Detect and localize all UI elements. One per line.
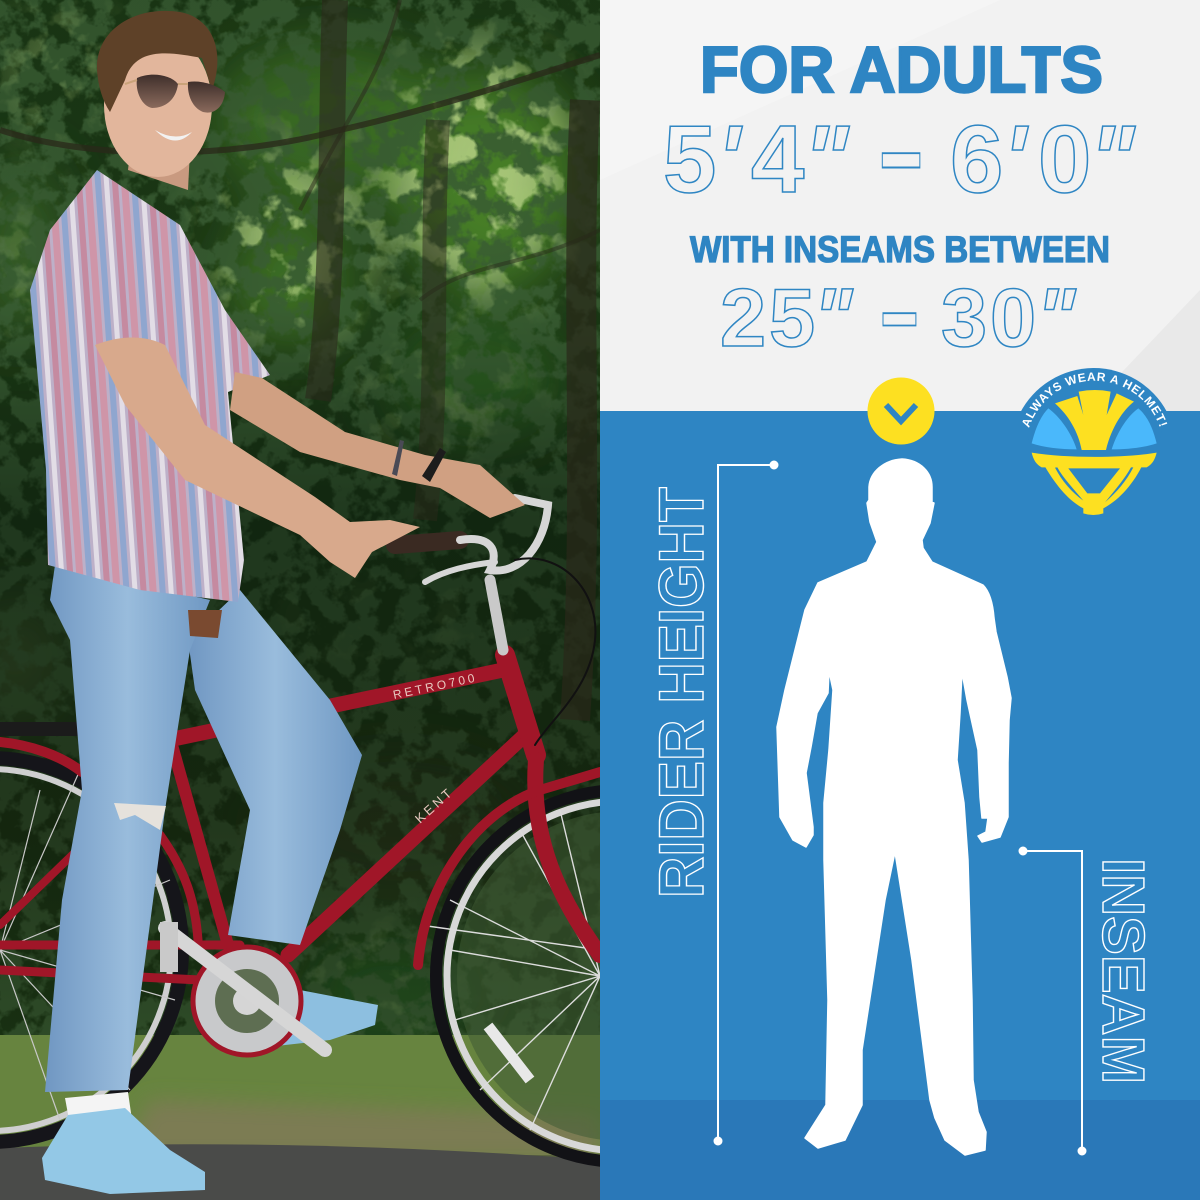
inseam range <box>720 241 1077 380</box>
inseam range: 2 <box>720 271 766 364</box>
front wheel <box>420 790 808 1162</box>
height range: " <box>1089 106 1136 213</box>
height range: 6 <box>950 106 1003 213</box>
height range: ' <box>1003 106 1029 213</box>
label: rider height: RIDER HEIGHT <box>647 487 717 898</box>
height range: – <box>880 70 922 230</box>
near shoe <box>42 1092 205 1194</box>
icon: always wear a helmet badge: ALWAYS WEAR A HELMET! <box>1022 372 1168 428</box>
height range: ' <box>717 106 743 213</box>
inseam bracket <box>1020 848 1086 1154</box>
forest background <box>0 0 600 1200</box>
rear wheel <box>0 758 182 1142</box>
depth shading <box>0 0 600 1040</box>
blue body background <box>600 411 1200 1200</box>
height range <box>663 70 1136 230</box>
far leg in jeans <box>188 590 362 945</box>
frame lettering: RETRO700 <box>392 670 479 702</box>
height range: 0 <box>1038 106 1091 213</box>
foliage texture <box>0 0 600 1040</box>
subheading: inseams: WITH INSEAMS BETWEEN <box>690 229 1110 270</box>
ground <box>0 1035 600 1155</box>
rider near arm <box>95 338 420 578</box>
handlebars <box>395 498 595 745</box>
human silhouette <box>777 459 1011 1155</box>
wristband <box>422 448 446 482</box>
icon: yellow chevron badge <box>868 378 934 444</box>
far shoe <box>235 990 378 1050</box>
shirt <box>30 170 270 602</box>
height range: 5 <box>663 106 716 213</box>
rider height bracket <box>714 462 778 1144</box>
darker floor band <box>600 1100 1200 1200</box>
panel: photo of rider on red bicycle <box>0 0 600 1200</box>
sunlit leaves <box>0 0 600 1040</box>
inseam range: " <box>813 271 854 364</box>
rider head <box>97 11 225 190</box>
light header background <box>600 0 1200 411</box>
inseam range: 5 <box>769 271 815 364</box>
bracelet <box>392 440 404 476</box>
panel: sizing information <box>600 0 1200 1200</box>
height range: " <box>803 106 850 213</box>
tree trunks and branches <box>0 0 600 720</box>
height range: 4 <box>751 106 804 213</box>
near leg in jeans <box>45 565 210 1092</box>
frame lettering <box>392 670 479 826</box>
inseam range: " <box>1036 271 1077 364</box>
bicycle frame <box>0 655 600 980</box>
inseam range: 3 <box>941 271 987 364</box>
inseam range: – <box>881 241 918 380</box>
heading: for adults: FOR ADULTS <box>700 33 1103 106</box>
knee rip <box>114 803 166 830</box>
icon: always wear a helmet badge <box>1021 368 1168 515</box>
belt gap <box>188 610 222 638</box>
inseam range: 0 <box>990 271 1036 364</box>
rider far arm <box>230 372 525 518</box>
rear rack <box>0 722 80 736</box>
frame lettering: KENT <box>412 784 457 826</box>
label: inseam: INSEAM <box>1090 858 1156 1084</box>
crankset <box>160 922 325 1055</box>
